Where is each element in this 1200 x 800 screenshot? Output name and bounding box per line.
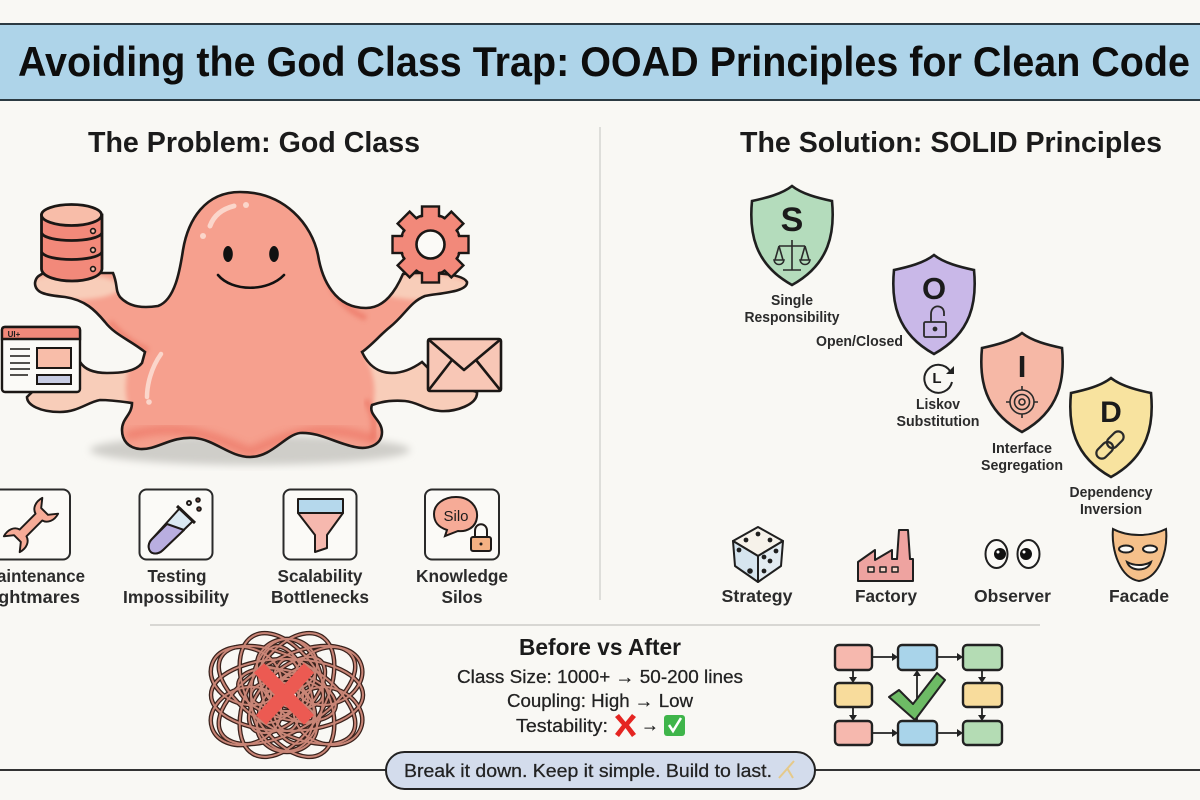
problem item: scalability bottlenecks: Scalability [278, 566, 363, 586]
pattern: facade: Facade [1109, 586, 1169, 606]
icon: theatre mask [1113, 529, 1166, 581]
icon: red cross [615, 714, 636, 737]
god class blob illustration [0, 192, 501, 465]
icon: green check mark [889, 673, 945, 720]
tagline pill [386, 752, 815, 789]
icon: silo speech bubble and lock: Silo [443, 508, 469, 525]
shield D: dependency inversion [1070, 378, 1152, 518]
icon: red x [259, 668, 309, 720]
shield D: dependency inversion: D [1100, 396, 1122, 429]
before vs after text: Testability: [516, 716, 608, 736]
pattern: factory: Factory [855, 586, 917, 606]
icon: test tube [149, 498, 201, 554]
heading: the problem: The Problem: God Class [88, 127, 420, 159]
icon: dice [733, 527, 783, 582]
before vs after text: Coupling: High → Low [507, 691, 694, 711]
pattern: factory [855, 530, 917, 606]
shield D: dependency inversion: Dependency [1070, 485, 1152, 501]
icon: scales [774, 240, 810, 270]
problem item: testing impossibility [123, 490, 229, 607]
pattern: strategy [722, 527, 793, 606]
shield O: open/closed: Open/Closed [816, 334, 903, 350]
shield I: interface segregation: I [1018, 349, 1026, 384]
shield S: single responsibility: Responsibility [744, 310, 840, 326]
icon: factory [858, 530, 913, 581]
icon: funnel [298, 499, 343, 552]
clean modular flow diagram [835, 645, 1002, 745]
tagline pill: Break it down. Keep it simple. Build to last. [404, 761, 772, 781]
problem item: scalability bottlenecks [271, 490, 369, 607]
icon: compass [779, 761, 794, 778]
before vs after text: Before vs After [519, 634, 681, 660]
icon: chain link [1094, 429, 1126, 461]
problem item: testing impossibility: Testing [148, 566, 206, 586]
icon: green check [664, 715, 685, 736]
principle L: liskov substitution [896, 365, 980, 430]
shield S: single responsibility [744, 186, 840, 326]
shield S: single responsibility: S [781, 201, 803, 239]
problem item: scalability bottlenecks: Bottlenecks [271, 587, 369, 607]
shield S: single responsibility: Single [771, 293, 813, 309]
icon: ui window [2, 327, 80, 392]
icon: eyes [986, 540, 1040, 568]
pattern: strategy: Strategy [722, 586, 793, 606]
shield O: open/closed: O [922, 271, 946, 306]
title banner [0, 24, 1200, 100]
problem item: knowledge silos: Silos [442, 587, 483, 607]
icon: envelope [428, 339, 501, 391]
problem item: maintenance nightmares [0, 490, 85, 607]
icon: wrench [3, 497, 59, 553]
heading: the solution: The Solution: SOLID Principles [740, 127, 1162, 159]
principle L: liskov substitution: Substitution [896, 414, 980, 430]
icon: ui window: UI+ [8, 330, 21, 339]
problem item: testing impossibility: Impossibility [123, 587, 229, 607]
pattern: observer [974, 540, 1051, 606]
before vs after text [457, 634, 743, 737]
pattern: observer: Observer [974, 586, 1051, 606]
tangled spaghetti code [203, 617, 371, 773]
principle L: liskov substitution: Liskov [916, 397, 960, 413]
arrow: → [641, 715, 659, 735]
icon: target [1006, 386, 1038, 418]
icon: database [42, 204, 102, 281]
icon: gear [392, 206, 468, 282]
icon: circular arrow L: L [932, 370, 942, 387]
shield I: interface segregation: Segregation [981, 458, 1063, 474]
problem item: knowledge silos: Knowledge [416, 566, 508, 586]
problem item: knowledge silos [416, 490, 508, 607]
pattern: facade [1109, 529, 1169, 606]
shield I: interface segregation: Interface [992, 441, 1052, 457]
shield D: dependency inversion: Inversion [1080, 502, 1142, 518]
icon: open padlock [924, 306, 946, 337]
shield O: open/closed [816, 255, 975, 354]
shield I: interface segregation [981, 333, 1063, 474]
face [218, 246, 284, 288]
before vs after text: Class Size: 1000+ → 50-200 lines [457, 667, 743, 687]
